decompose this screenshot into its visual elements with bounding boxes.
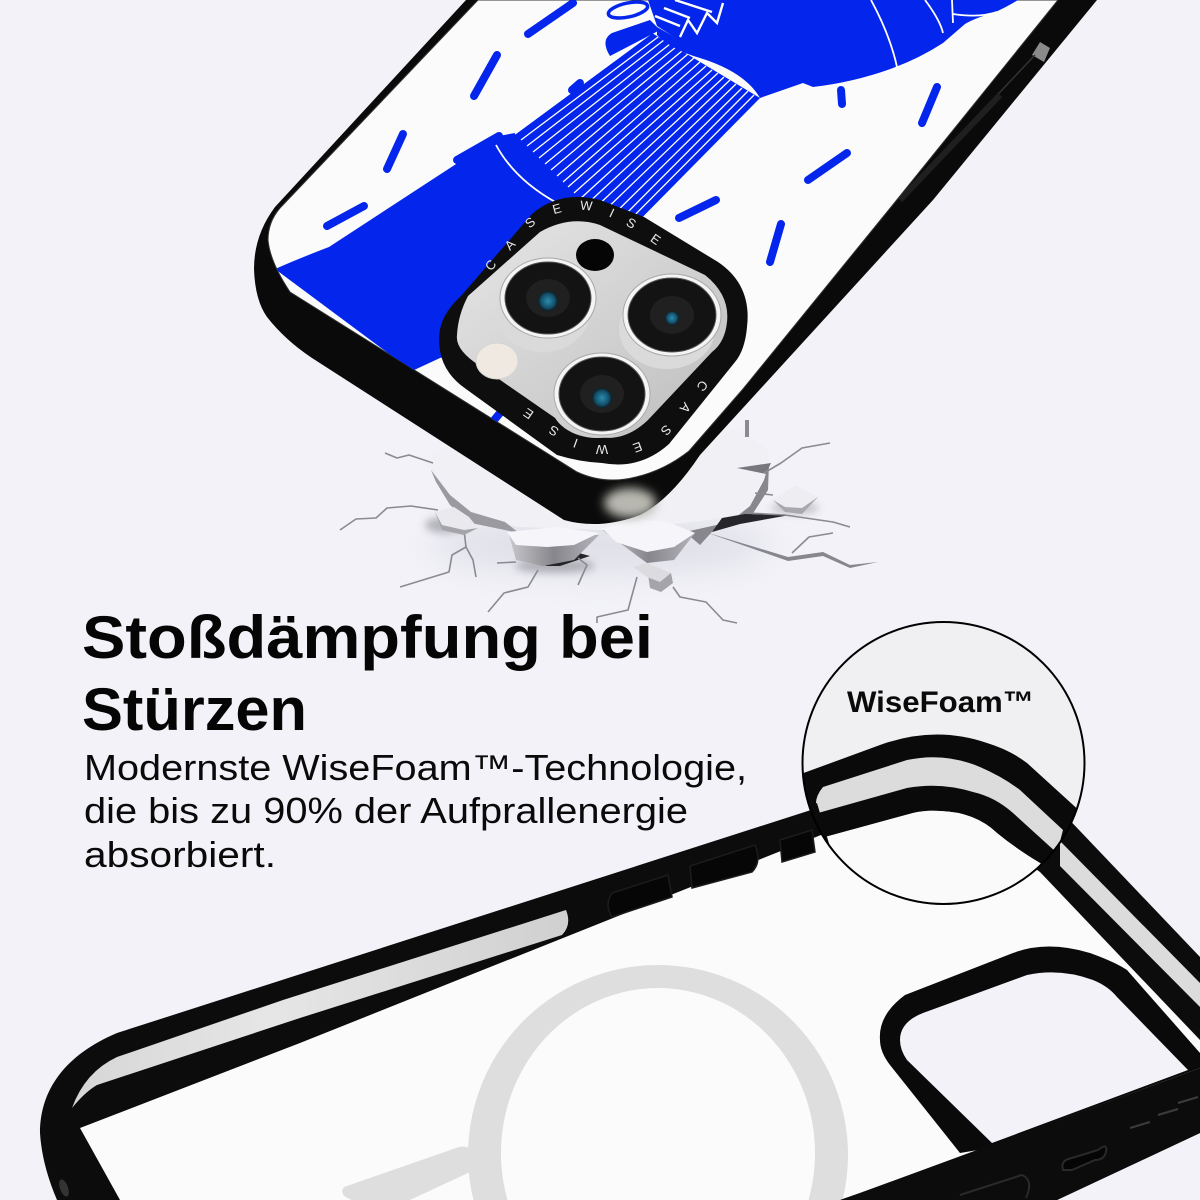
brand ring top: E — [551, 200, 563, 217]
brand ring top: S — [522, 214, 539, 231]
sleeve — [276, 132, 578, 370]
body text: Modernste WiseFoam™-Technologie, — [84, 747, 747, 788]
right foam slot — [1060, 841, 1200, 1007]
phone seen behind the lens — [816, 803, 830, 844]
magnifier callout — [802, 621, 1086, 905]
side buttons — [608, 830, 815, 917]
magnetic ring — [468, 965, 848, 1200]
case body — [254, 0, 1097, 524]
brand ring top: C — [482, 257, 499, 274]
camera island — [439, 197, 748, 464]
brand ring bottom: A — [677, 400, 694, 416]
clear back panel — [80, 800, 1200, 1200]
lens 1 — [496, 258, 596, 352]
body text: absorbiert. — [84, 834, 276, 875]
brand ring bottom — [520, 377, 711, 457]
small rock left — [435, 507, 478, 535]
camera cut-out — [880, 946, 1200, 1153]
blue illustration — [275, 0, 1018, 425]
bottom band — [840, 1068, 1200, 1200]
cuff line — [496, 145, 557, 203]
lens 3 — [551, 353, 650, 438]
brand ring bottom: C — [694, 377, 711, 394]
silver phone back — [457, 221, 727, 438]
magnified corner — [804, 734, 1076, 903]
bottom edge details — [960, 1097, 1198, 1198]
brand ring top: I — [607, 205, 617, 220]
lace — [605, 0, 735, 56]
body text — [84, 747, 747, 875]
top phone with case — [254, 0, 1097, 524]
case frame — [40, 760, 1200, 1200]
rock centre — [602, 520, 695, 563]
left edge hole — [57, 1178, 71, 1198]
small rock right — [773, 485, 818, 514]
body text: die bis zu 90% der Aufprallenergie — [84, 790, 688, 831]
brand ring bottom: E — [520, 405, 536, 422]
microphone — [576, 239, 614, 271]
lower clear case — [40, 760, 1200, 1200]
brand ring top: A — [501, 236, 518, 253]
motion dashes — [327, 3, 937, 425]
callout label: WiseFoam™ — [847, 686, 1034, 719]
brand ring bottom: E — [631, 439, 644, 456]
brand ring top: W — [580, 198, 594, 214]
case highlights — [604, 42, 1050, 518]
brand ring bottom: I — [571, 436, 580, 451]
screen back — [268, 0, 1058, 480]
brand ring bottom: W — [595, 442, 608, 457]
magnet alignment pill — [342, 1147, 478, 1200]
left foam slot — [72, 910, 568, 1108]
brand ring top: S — [624, 214, 639, 232]
heading: Stürzen — [82, 676, 307, 743]
brand ring top — [482, 198, 664, 274]
lens 2 — [619, 274, 721, 369]
brand ring bottom: S — [546, 422, 561, 440]
heading: Stoßdämpfung bei — [82, 604, 653, 671]
brand ring bottom: S — [658, 422, 675, 439]
fist — [657, 0, 1018, 98]
brand ring top: E — [648, 231, 664, 248]
rock left — [507, 527, 599, 566]
stripes — [518, 34, 760, 217]
heading — [82, 604, 653, 743]
flash — [476, 343, 518, 379]
impact cracks in the ground — [340, 420, 878, 623]
small rock bottom — [633, 563, 673, 592]
